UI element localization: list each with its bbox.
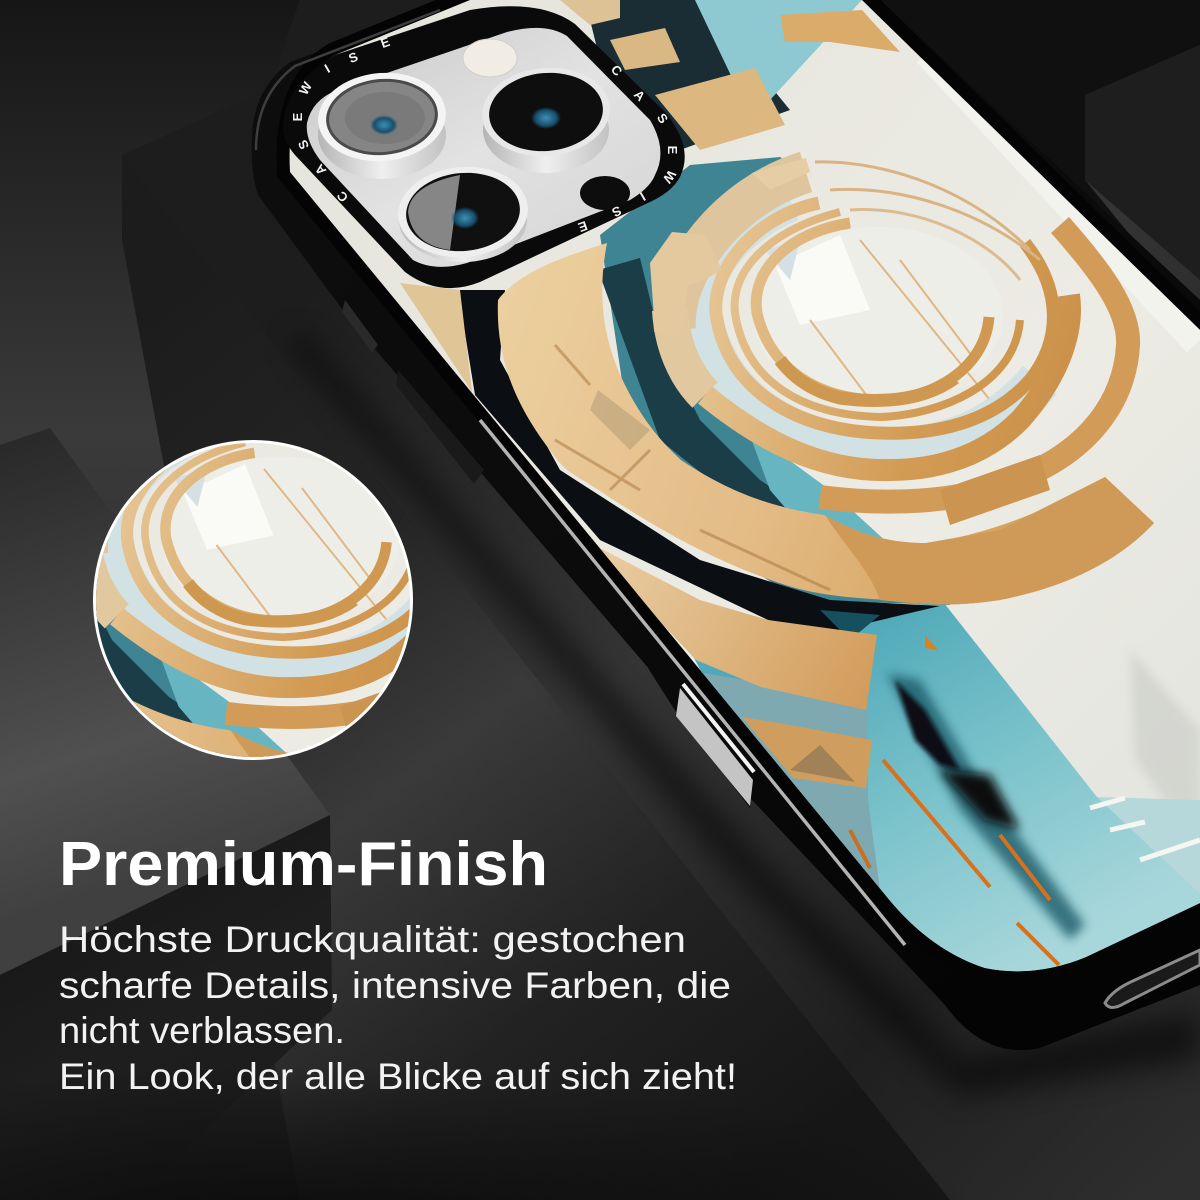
black rim (290, 0, 1200, 971)
island frame (283, 6, 685, 288)
brand text on the left of the ring: W (296, 79, 315, 97)
side button: volume (396, 370, 484, 484)
description text (59, 919, 737, 1097)
description text: scharfe Details, intensive Farben, die (59, 965, 731, 1006)
brand text on the right of the ring: I (637, 189, 648, 204)
brand text on the right of the ring: S (609, 203, 624, 220)
island glass (307, 28, 660, 267)
lens: bottom (394, 162, 532, 262)
side button: camera control (648, 668, 754, 808)
camera island (283, 6, 685, 288)
brand text on the left of the ring: E (379, 34, 392, 51)
brand text on the right of the ring (576, 62, 680, 235)
brand text on the left of the ring: I (322, 61, 333, 76)
bottom vignette (0, 1000, 1200, 1200)
flash (463, 39, 517, 77)
description text: nicht verblassen. (59, 1010, 345, 1051)
brand text on the left of the ring: S (346, 49, 360, 66)
brand text on the right of the ring: C (608, 62, 626, 79)
brand text on the right of the ring: A (631, 87, 649, 104)
brand text on the right of the ring: S (654, 110, 671, 126)
title: Premium-Finish (59, 830, 548, 899)
description text: Ein Look, der alle Blicke auf sich zieht! (59, 1056, 737, 1097)
case body (252, 0, 1200, 1050)
background block: platform side (122, 155, 950, 1200)
brand text on the right of the ring: E (576, 218, 589, 235)
brand text on the right of the ring: W (660, 167, 679, 187)
phone shadow (290, 330, 1200, 1095)
background block: left cube front (0, 815, 332, 1200)
background block: left cube top (0, 428, 330, 975)
rim highlight (480, 420, 905, 945)
microphone hole (580, 176, 630, 210)
background block: upper right shelf (880, 0, 1200, 330)
brand text on the left of the ring: S (295, 137, 312, 152)
brand text on the left of the ring: C (333, 188, 351, 205)
charging port (1105, 950, 1200, 1008)
side button: upper (342, 300, 378, 352)
artwork (290, 0, 1200, 972)
brand text on the right of the ring: E (665, 146, 680, 155)
brand text on the left of the ring (290, 34, 392, 205)
brand text on the left of the ring: A (311, 161, 329, 178)
lens: left (314, 68, 450, 179)
phone case (250, 0, 1200, 1050)
detail magnifier circle (93, 440, 413, 760)
description text: Höchste Druckqualität: gestochen (59, 919, 686, 960)
brand text on the left of the ring: E (290, 112, 305, 121)
lens: right (478, 63, 614, 173)
upper corner gloss (256, 10, 440, 150)
